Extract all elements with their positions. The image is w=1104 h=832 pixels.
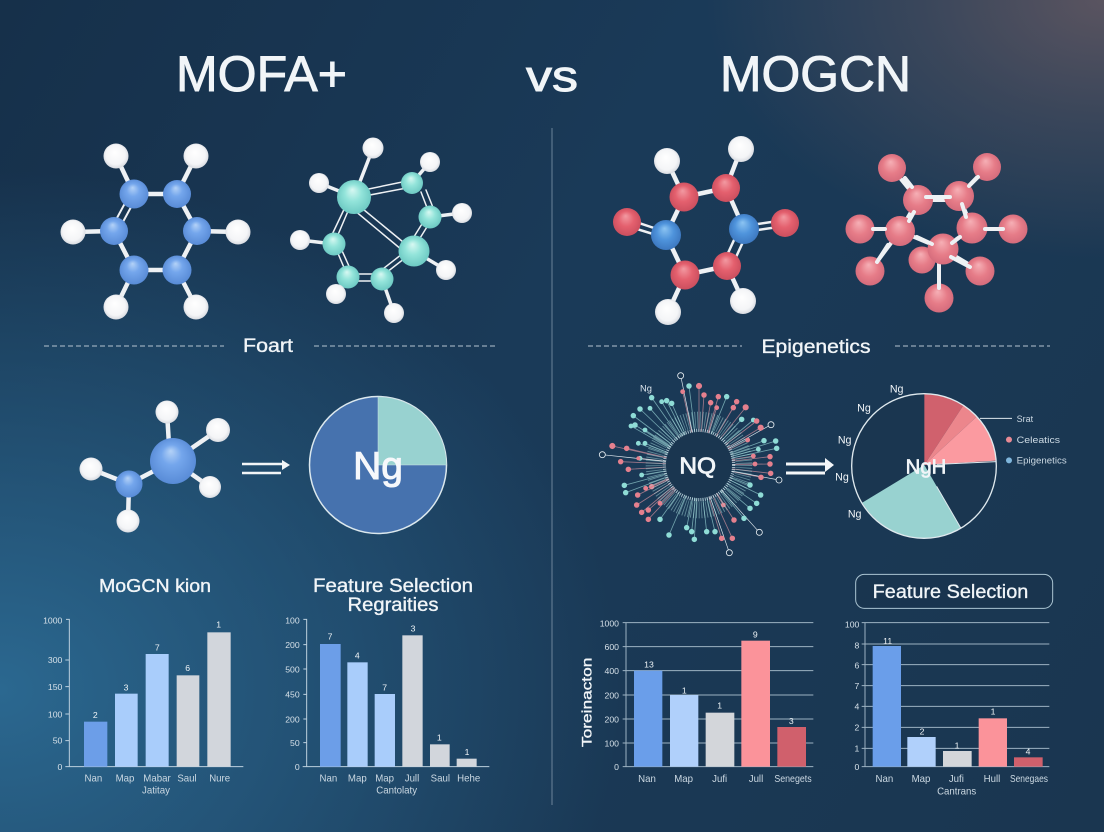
bar chart 4: 11 xyxy=(883,636,892,646)
pie chart: right xyxy=(835,384,996,538)
pie legend: Celeatics xyxy=(1017,435,1061,445)
pie chart: left xyxy=(310,396,446,534)
bar chart 3: Senegets xyxy=(774,774,812,785)
center divider xyxy=(551,128,553,805)
bar chart 3: Jufi xyxy=(712,774,727,785)
pie legend xyxy=(980,414,1067,466)
pie chart: right: NgH xyxy=(906,455,946,478)
pie chart: right: Ng xyxy=(838,434,852,446)
bar chart 4: 100 xyxy=(845,619,860,629)
pie legend: Srat xyxy=(1017,414,1034,424)
network diagram xyxy=(599,373,782,556)
bar chart 3: 1000 xyxy=(600,619,619,629)
molecule: blue hexagon xyxy=(60,144,250,320)
title: vs: vs xyxy=(526,52,578,101)
section divider: Epigenetics: Epigenetics xyxy=(762,337,870,358)
bar chart 4: Cantrans xyxy=(937,786,976,797)
bar chart 2: 200 xyxy=(285,640,300,650)
bar chart 3 xyxy=(578,619,813,785)
bar chart 2: 0 xyxy=(295,762,300,772)
bar chart 2: Hehe xyxy=(457,773,480,784)
bar chart 1: Nure xyxy=(209,773,230,784)
bar chart 3: 600 xyxy=(605,642,619,652)
pie chart: right: Ng xyxy=(857,403,871,415)
bar chart 4: 6 xyxy=(855,660,860,670)
bar chart 4: 1 xyxy=(855,743,860,753)
bar chart 4: 7 xyxy=(855,681,860,691)
bar chart 2: 100 xyxy=(285,615,300,625)
bar chart 2: 50 xyxy=(290,738,300,748)
bar chart 3: Toreinacton xyxy=(578,658,594,747)
bar chart 3: 9 xyxy=(753,630,758,640)
bar chart 4: 2 xyxy=(920,726,925,736)
bar chart 1: 1000 xyxy=(43,615,63,625)
chart title: Feature Selection Regraities: Feature Selection xyxy=(313,576,473,597)
bar chart 1: 100 xyxy=(48,709,63,719)
bar chart 1 xyxy=(43,615,243,797)
molecule: small blue xyxy=(80,400,230,532)
bar chart 4: 8 xyxy=(855,640,860,650)
heading box: Feature Selection: Feature Selection xyxy=(873,582,1028,603)
bar chart 2: 1 xyxy=(437,733,442,743)
bar chart 2: Map xyxy=(375,773,394,784)
bar chart 3: Jull xyxy=(749,774,763,785)
bar chart 1: 6 xyxy=(185,663,190,673)
title: MOGCN: MOGCN xyxy=(720,46,911,102)
bar chart 2: 7 xyxy=(328,632,333,642)
section divider: Foart: Foart xyxy=(243,336,294,357)
bar chart 3: 400 xyxy=(605,666,619,676)
bar chart 4: Jufi xyxy=(949,774,964,785)
arrow: right xyxy=(786,458,834,473)
bar chart 2: 3 xyxy=(411,624,416,634)
bar chart 3: Nan xyxy=(638,774,656,785)
bar chart 2: 500 xyxy=(285,664,300,674)
bar chart 3: 13 xyxy=(644,659,654,669)
bar chart 4: Map xyxy=(912,774,930,785)
bar chart 2: 450 xyxy=(285,690,300,700)
bar chart 1: Saul xyxy=(177,773,197,784)
bar chart 2: 200 xyxy=(285,714,300,724)
arrow: left xyxy=(242,460,290,473)
bar chart 4: 1 xyxy=(991,707,996,717)
bar chart 1: 7 xyxy=(155,643,160,653)
bar chart 2: 7 xyxy=(382,682,387,692)
bar chart 2: Saul xyxy=(431,773,450,784)
network diagram: Ng xyxy=(640,384,652,394)
bar chart 4: Hull xyxy=(984,774,1000,785)
chart title: Feature Selection Regraities xyxy=(313,576,473,616)
bar chart 2 xyxy=(285,615,489,797)
bar chart 2: Nan xyxy=(319,773,337,784)
bar chart 4: Senegaes xyxy=(1010,774,1048,785)
bar chart 2: 1 xyxy=(465,747,470,757)
bar chart 4 xyxy=(845,619,1049,797)
pie chart: right: Ng xyxy=(890,384,904,396)
pie legend: Epigenetics xyxy=(1017,456,1067,466)
bar chart 1: 300 xyxy=(48,655,63,665)
bar chart 4: 1 xyxy=(955,740,960,750)
bar chart 4: 4 xyxy=(855,702,860,712)
pie chart: right: Ng xyxy=(835,472,849,484)
bar chart 4: 2 xyxy=(855,723,860,733)
pie chart: right: Ng xyxy=(848,509,862,521)
bar chart 3: Map xyxy=(674,774,693,785)
bar chart 1: 3 xyxy=(124,682,129,692)
bar chart 2: Jull xyxy=(405,773,419,784)
bar chart 1: Jatitay xyxy=(142,786,170,797)
bar chart 2: Map xyxy=(348,773,367,784)
bar chart 2: Cantolaty xyxy=(376,786,417,797)
network diagram: NQ xyxy=(679,452,716,478)
chart title: Feature Selection Regraities: Regraities xyxy=(348,595,438,616)
bar chart 4: Nan xyxy=(875,774,893,785)
bar chart 4: 4 xyxy=(1026,746,1031,756)
molecule: teal ring xyxy=(290,138,472,323)
bar chart 3: 1 xyxy=(717,701,722,711)
chart title: MoGCN kion: MoGCN kion xyxy=(99,576,211,596)
bar chart 3: 100 xyxy=(605,738,619,748)
molecule: pink cluster xyxy=(846,153,1028,312)
bar chart 1: Mabar xyxy=(143,773,171,784)
bar chart 2: 4 xyxy=(355,651,360,661)
title: MOFA+: MOFA+ xyxy=(176,46,347,102)
bar chart 1: 50 xyxy=(53,736,63,746)
bar chart 1: Nan xyxy=(84,773,102,784)
bar chart 4: 0 xyxy=(855,762,860,772)
pie chart: left: Ng xyxy=(353,445,403,488)
bar chart 3: 200 xyxy=(605,690,619,700)
bar chart 1: 2 xyxy=(93,710,98,720)
bar chart 1: 150 xyxy=(48,682,63,692)
bar chart 1: 0 xyxy=(58,762,63,772)
bar chart 3: 1 xyxy=(682,685,687,695)
heading box: Feature Selection xyxy=(856,574,1053,608)
bar chart 3: 3 xyxy=(789,716,794,726)
bar chart 1: Map xyxy=(116,773,134,784)
bar chart 3: 200 xyxy=(605,714,619,724)
bar chart 3: 0 xyxy=(614,762,619,772)
bar chart 1: 1 xyxy=(216,620,221,630)
molecule: red and blue ring xyxy=(613,136,799,325)
